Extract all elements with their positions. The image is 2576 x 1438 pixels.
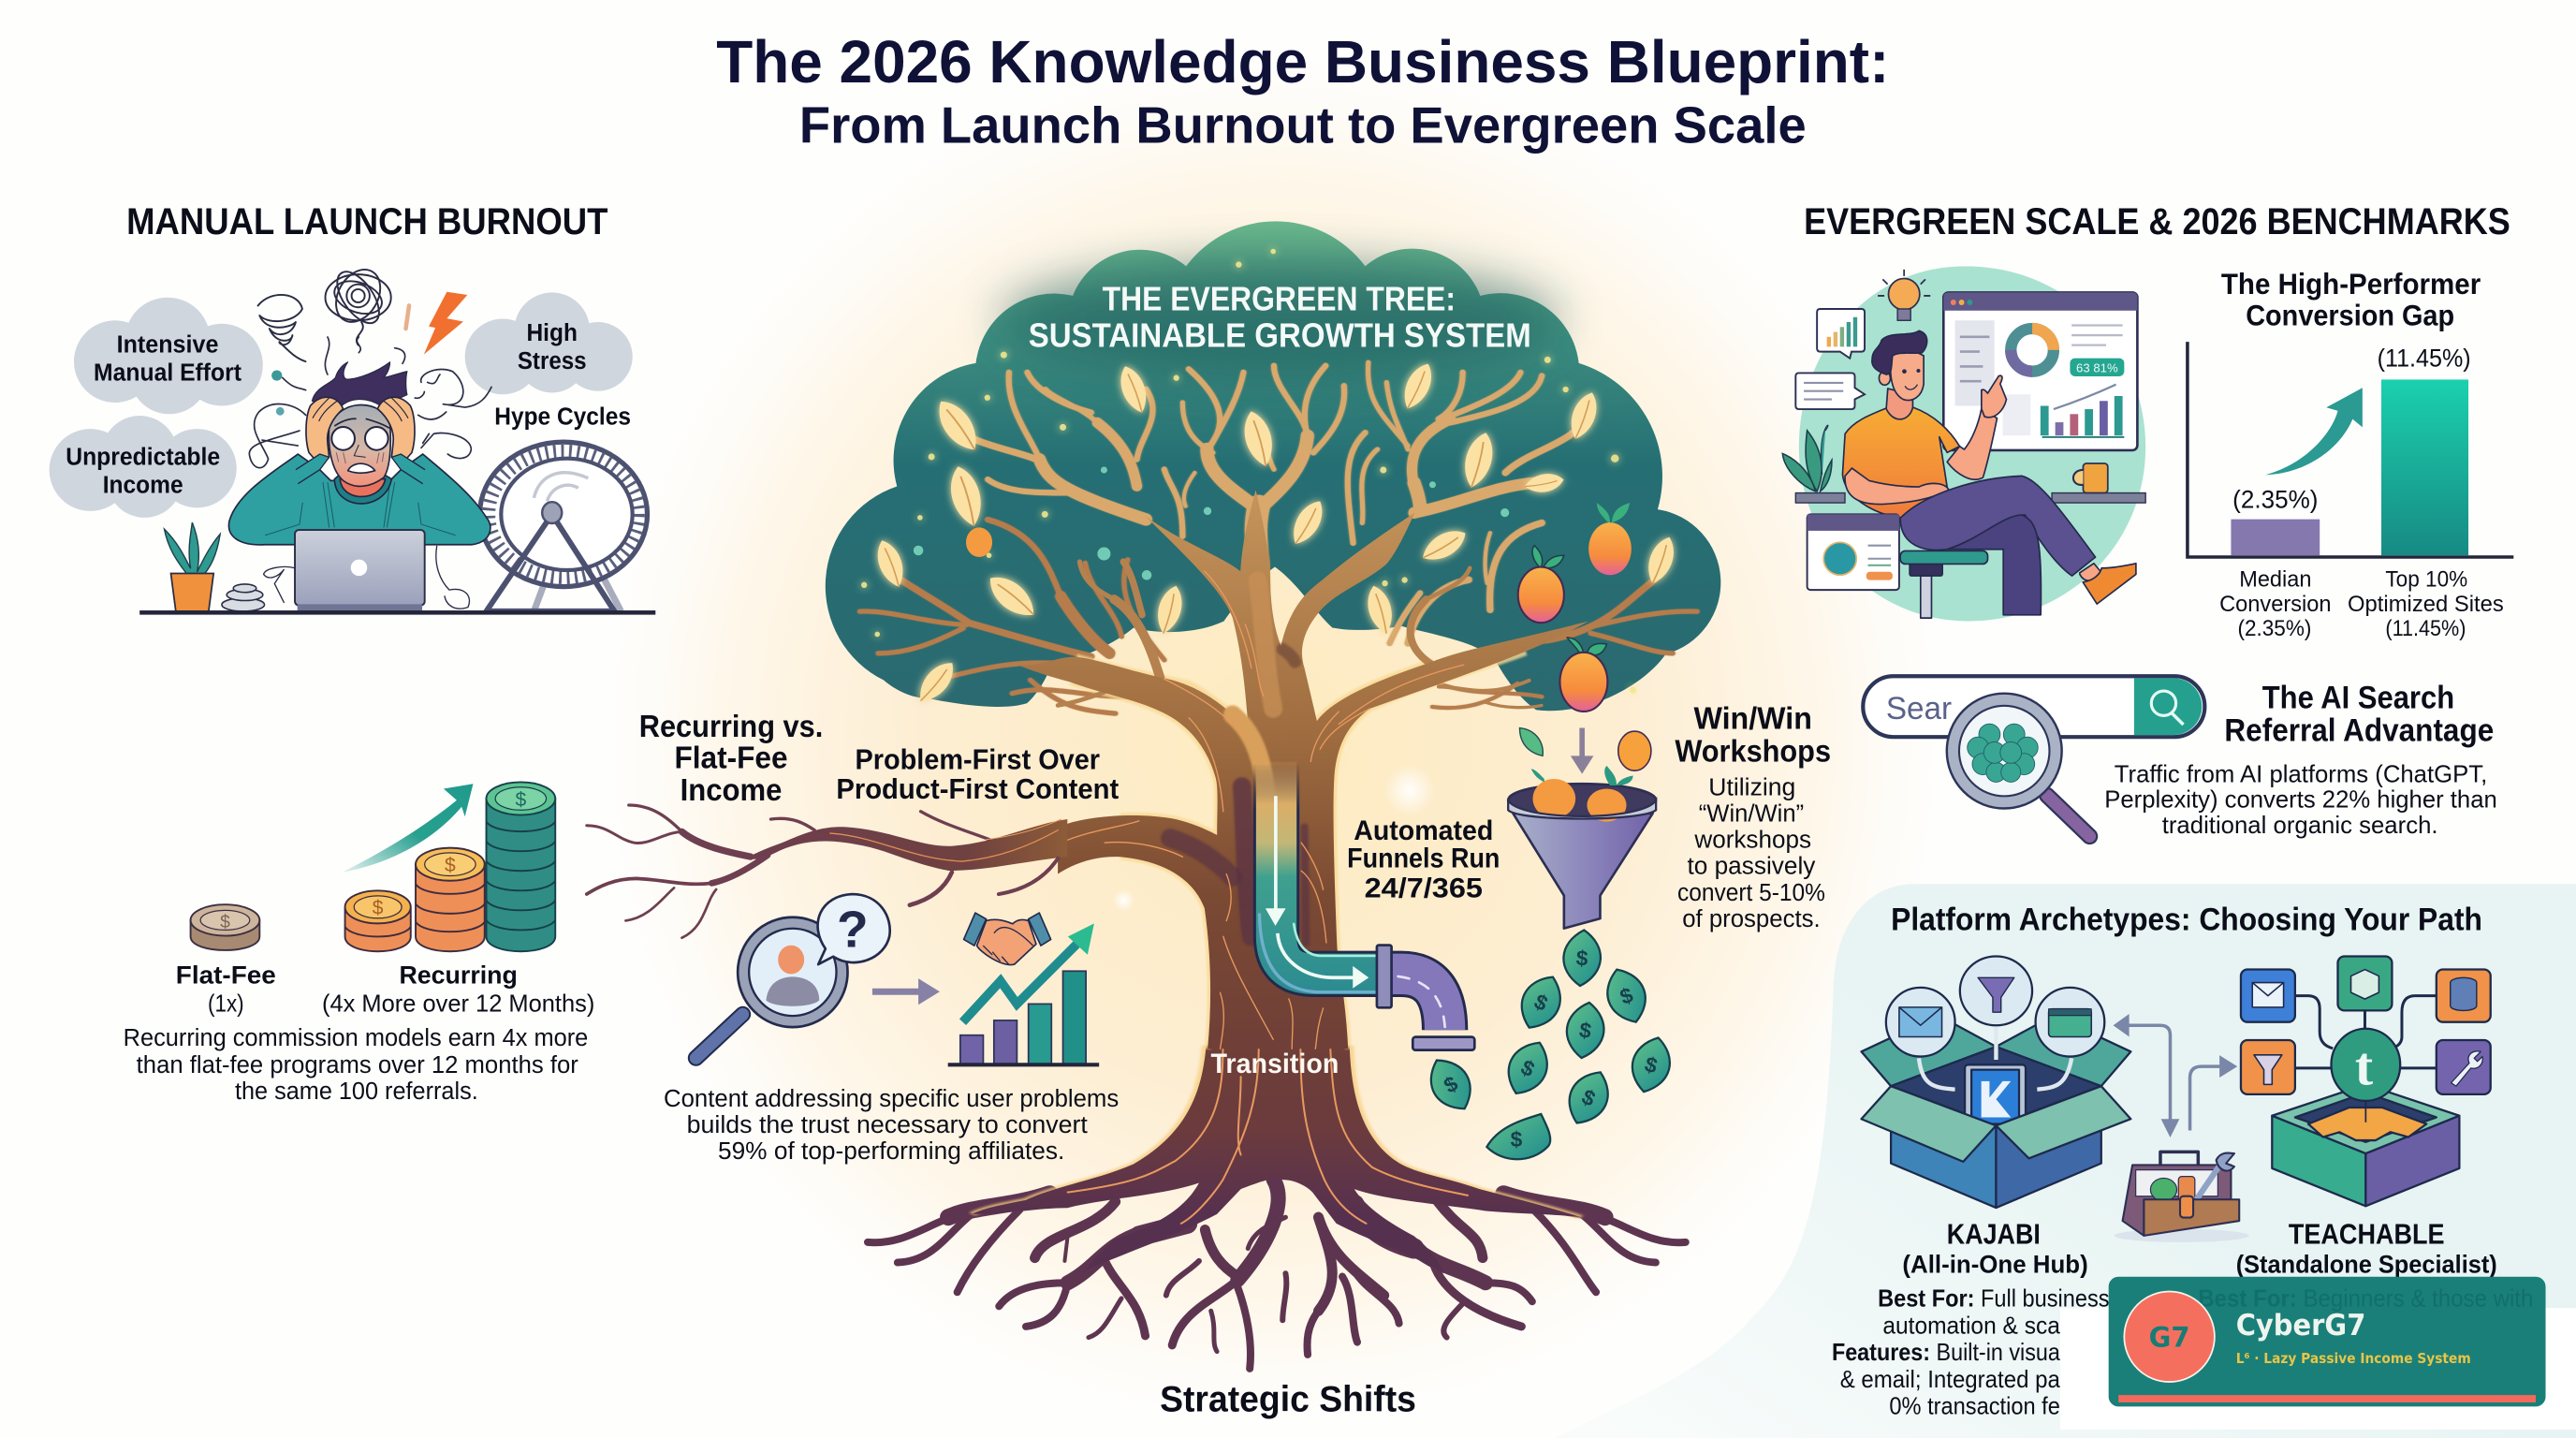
lit streaks [1061,571,1464,1049]
icon: magnifier with person [695,917,848,1058]
leaf [1519,728,1543,756]
trunk and main limbs [1017,490,1588,1049]
value: 2.35%: (2.35%) [2232,484,2318,513]
heading: The AI Search [2262,680,2454,715]
label: teachable [2236,1218,2497,1278]
funnel body [1508,766,1656,929]
icon: gold coin stack [416,848,485,951]
fruit [966,503,1632,655]
text block: kajabi details: automation & sca [1882,1313,2061,1339]
icon: flat-fee coin [191,904,259,950]
shelves [1795,493,2145,503]
tagline: L⁶ · Lazy Passive Income System [2236,1350,2471,1367]
label: unpredictable income: Income [103,471,183,499]
axis label: top 10%: (11.45%) [2385,617,2466,641]
label: strategic shifts: Strategic Shifts [1160,1380,1416,1420]
money leaves: $ [1575,946,1589,971]
icon: handshake [964,913,1051,965]
axis label: median [2219,568,2331,641]
badge: CyberG7 [2109,1277,2546,1406]
label: kajabi: (All-in-One Hub) [1902,1249,2088,1278]
money leaves: $ [1578,1084,1600,1111]
bar: median [2231,520,2320,555]
axis label: median: Median [2239,568,2311,593]
label: recurring: (4x More over 12 Months) [322,990,594,1017]
label: intensive manual effort: Manual Effort [94,358,242,386]
axis label: top 10% [2348,568,2504,641]
cloud: high stress [465,292,633,394]
panel: platform background [1553,884,2576,1438]
plant [165,522,220,611]
label: kajabi [1902,1218,2088,1278]
laptop [295,530,425,611]
branch: lower left [587,805,1067,938]
panel: burnout illustration [50,262,655,615]
heading: Platform Archetypes: Choosing Your Path [1891,902,2482,937]
text block: problem-first explanation: 59% of top-performing affiliates. [718,1137,1064,1165]
panel: coins comparison [124,782,594,1105]
body text: traditional organic search. [2162,813,2438,839]
funnel: automated fruit to money [1421,728,1676,1159]
body text: Perplexity) converts 22% higher than [2104,787,2497,814]
sparkles: teal motes [914,466,1509,580]
heading: evergreen scale: EVERGREEN SCALE & 2026 BENCHMARKS [1804,201,2510,242]
money leaves: $ [1642,1051,1661,1078]
roots [868,1180,1686,1369]
icon: gold coin stack: $ [445,855,456,876]
text block: kajabi details: Best For: Full business [1878,1285,2110,1312]
arrow: to results [872,978,940,1005]
tree: evergreen system [587,221,1720,1369]
text block: win/win workshops: Workshops [1675,735,1831,770]
title: From Launch Burnout to Evergreen Scale [799,97,1807,154]
heading: Referral Advantage [2224,713,2494,749]
icon: kajabi open box [1862,956,2130,1208]
money leaves: $ [1517,1054,1539,1081]
monitor dashboard: 63 81% [2076,361,2118,375]
money leaves: $ [1530,989,1552,1016]
label: intensive manual effort [94,330,242,386]
sparkles [861,249,1636,694]
plant [1782,431,1832,492]
pipe: transition [1260,762,1474,1050]
panel: AI search [1863,676,2497,839]
branches [860,362,1697,713]
label: unpredictable income: Unpredictable [66,443,220,471]
text block: problem-first explanation: Content addressing specific user problems [664,1084,1119,1112]
heading: problem-first [836,742,1119,805]
text block: win/win workshops: Utilizing [1708,772,1795,800]
icon: toolbox [2115,1152,2249,1242]
leaves [871,360,1680,708]
money leaves: $ [1578,1018,1593,1043]
body text: Traffic from AI platforms (ChatGPT, [2115,761,2487,787]
axis label: top 10%: Top 10% [2385,568,2467,593]
upper side branches [1058,562,1542,708]
text block: win/win workshops: “Win/Win” [1699,800,1804,828]
axis label: median: Conversion [2219,593,2331,617]
arrow: down [1571,728,1593,774]
arrows: between platforms [2116,1017,2234,1134]
label: teachable: (Standalone Specialist) [2236,1249,2497,1278]
text block: win/win workshops: to passively [1687,852,1816,880]
text block: win/win workshops: Win/Win [1694,701,1812,736]
speech bubble: chart [1817,309,1865,359]
text block: recurring explanation: than flat-fee programs over 12 months for [137,1050,578,1078]
watermark backing [2060,1308,2576,1430]
canopy [826,221,1720,711]
small dashboard window [1808,514,1899,590]
stones [222,584,265,611]
search bar: Sear [1886,691,1952,726]
title [716,28,1889,154]
text block: kajabi details [1832,1285,2110,1419]
label: high stress: Stress [518,346,587,374]
label: flat-fee [176,960,276,1017]
icon: teachable box and tools [2241,956,2491,1206]
icon: teachable box and tools: t [2355,1035,2374,1096]
text block: recurring explanation: Recurring commission models earn 4x more [124,1023,588,1051]
icon: light bulb [1878,270,1930,320]
text block: recurring explanation: the same 100 referrals. [235,1077,478,1105]
heading: recurring vs flat-fee: Recurring vs. [639,710,823,744]
label: automated funnels [1347,815,1500,903]
axes [2188,342,2513,557]
label: flat-fee: (1x) [208,990,244,1017]
heading [2224,680,2494,749]
shading strands [1170,580,1306,943]
fruit on lower right branch [1559,653,1607,712]
text block: win/win workshops: convert 5-10% [1677,878,1825,906]
text block: kajabi details: & email; Integrated pa [1840,1367,2061,1393]
bar chart: rising [948,923,1099,1064]
panel: platform archetypes [1832,902,2497,1419]
body text [2104,761,2497,839]
icon: question bubble [818,894,890,964]
text block: kajabi details: 0% transaction fe [1889,1393,2060,1419]
soft light spots [1112,764,1436,912]
money leaves: $ [1511,1127,1523,1152]
cloud: intensive manual effort [74,298,263,414]
label: kajabi: KAJABI [1947,1218,2041,1251]
heading: recurring vs flat-fee [639,710,823,808]
fruit [1618,731,1651,770]
panel: problem-first illustration [664,894,1119,1165]
heading: problem-first: Problem-First Over [856,742,1100,775]
tree canopy title [1029,280,1531,354]
text block: kajabi details: Features: Built-in visua [1832,1340,2061,1366]
lower trunk flare [973,1046,1581,1273]
wheel: hype cycles [479,442,648,611]
text block: problem-first explanation: builds the trust necessary to convert [687,1110,1089,1138]
icon: orange coin stack: $ [373,898,384,919]
money leaves: $ [1617,982,1636,1009]
cloud: unpredictable income [50,416,237,518]
chart title: The High-Performer [2221,267,2481,301]
text block: win/win workshops: workshops [1693,826,1811,854]
bar chart: conversion gap [2188,267,2513,641]
panel: evergreen creator illustration [1782,266,2145,621]
heading: problem-first: Product-First Content [836,772,1119,805]
central warm glow [567,17,1980,1438]
icon: flat-fee coin: $ [220,913,230,932]
heading: recurring vs flat-fee: Flat-Fee [674,741,788,776]
brand name: CyberG7 [2236,1309,2365,1343]
text block: win/win workshops [1675,701,1831,932]
person: relaxed creator [1821,330,2136,618]
title: The 2026 Knowledge Business Blueprint: [716,28,1889,95]
person: stressed creator [228,362,490,545]
label: intensive manual effort: Intensive [117,330,218,358]
monitor dashboard [1943,292,2137,450]
icon: magnifier with brain [1947,694,2089,836]
mug [2073,463,2108,493]
search bar [1863,676,2204,737]
label: automated funnels: Automated [1354,815,1493,846]
axis label: top 10%: Optimized Sites [2348,593,2504,617]
logo circle: G7 [2149,1321,2190,1353]
label: transition: Transition [1211,1049,1339,1079]
overlapped text: Best For: Beginners & those with [2198,1285,2533,1312]
icon: orange coin stack [345,890,411,951]
label: teachable: TEACHABLE [2289,1218,2445,1251]
chart title [2221,267,2481,332]
label: unpredictable income [66,443,220,499]
tree canopy title: SUSTAINABLE GROWTH SYSTEM [1029,315,1531,354]
label: automated funnels: 24/7/365 [1365,873,1483,903]
label: flat-fee: Flat-Fee [176,960,276,989]
icon: scribbles and lightning [249,262,491,609]
text block: recurring explanation [124,1023,588,1105]
chart title: Conversion Gap [2246,299,2454,332]
text block: problem-first explanation [664,1084,1119,1165]
background circle [1799,266,2145,621]
icon: green coin stack [487,782,555,951]
icon: green coin stack: $ [516,789,527,811]
label: automated funnels: Funnels Run [1347,844,1500,874]
label: recurring [322,960,594,1017]
axis label: median: (2.35%) [2237,617,2311,641]
value: 11.45%: (11.45%) [2378,343,2471,372]
arrow: growth [342,784,473,873]
desk line [139,610,655,615]
speech bubble: text [1795,373,1865,409]
icon: question bubble: ? [837,901,869,959]
label: recurring: Recurring [399,960,518,989]
logo circle [2124,1292,2215,1382]
label: high stress [518,318,587,374]
label: high stress: High [527,318,578,346]
money leaves: $ [1440,1071,1462,1098]
bar: top 10% [2381,379,2468,555]
accent bar [2118,1395,2536,1402]
heading: manual launch burnout: MANUAL LAUNCH BURNOUT [126,201,607,242]
text block: win/win workshops: of prospects. [1682,904,1821,932]
tree canopy title: THE EVERGREEN TREE: [1103,280,1456,318]
label: hype cycles: Hype Cycles [494,403,631,431]
money leaves [1421,929,1676,1159]
arrow: gap [2265,388,2363,475]
heading: recurring vs flat-fee: Income [681,773,782,808]
